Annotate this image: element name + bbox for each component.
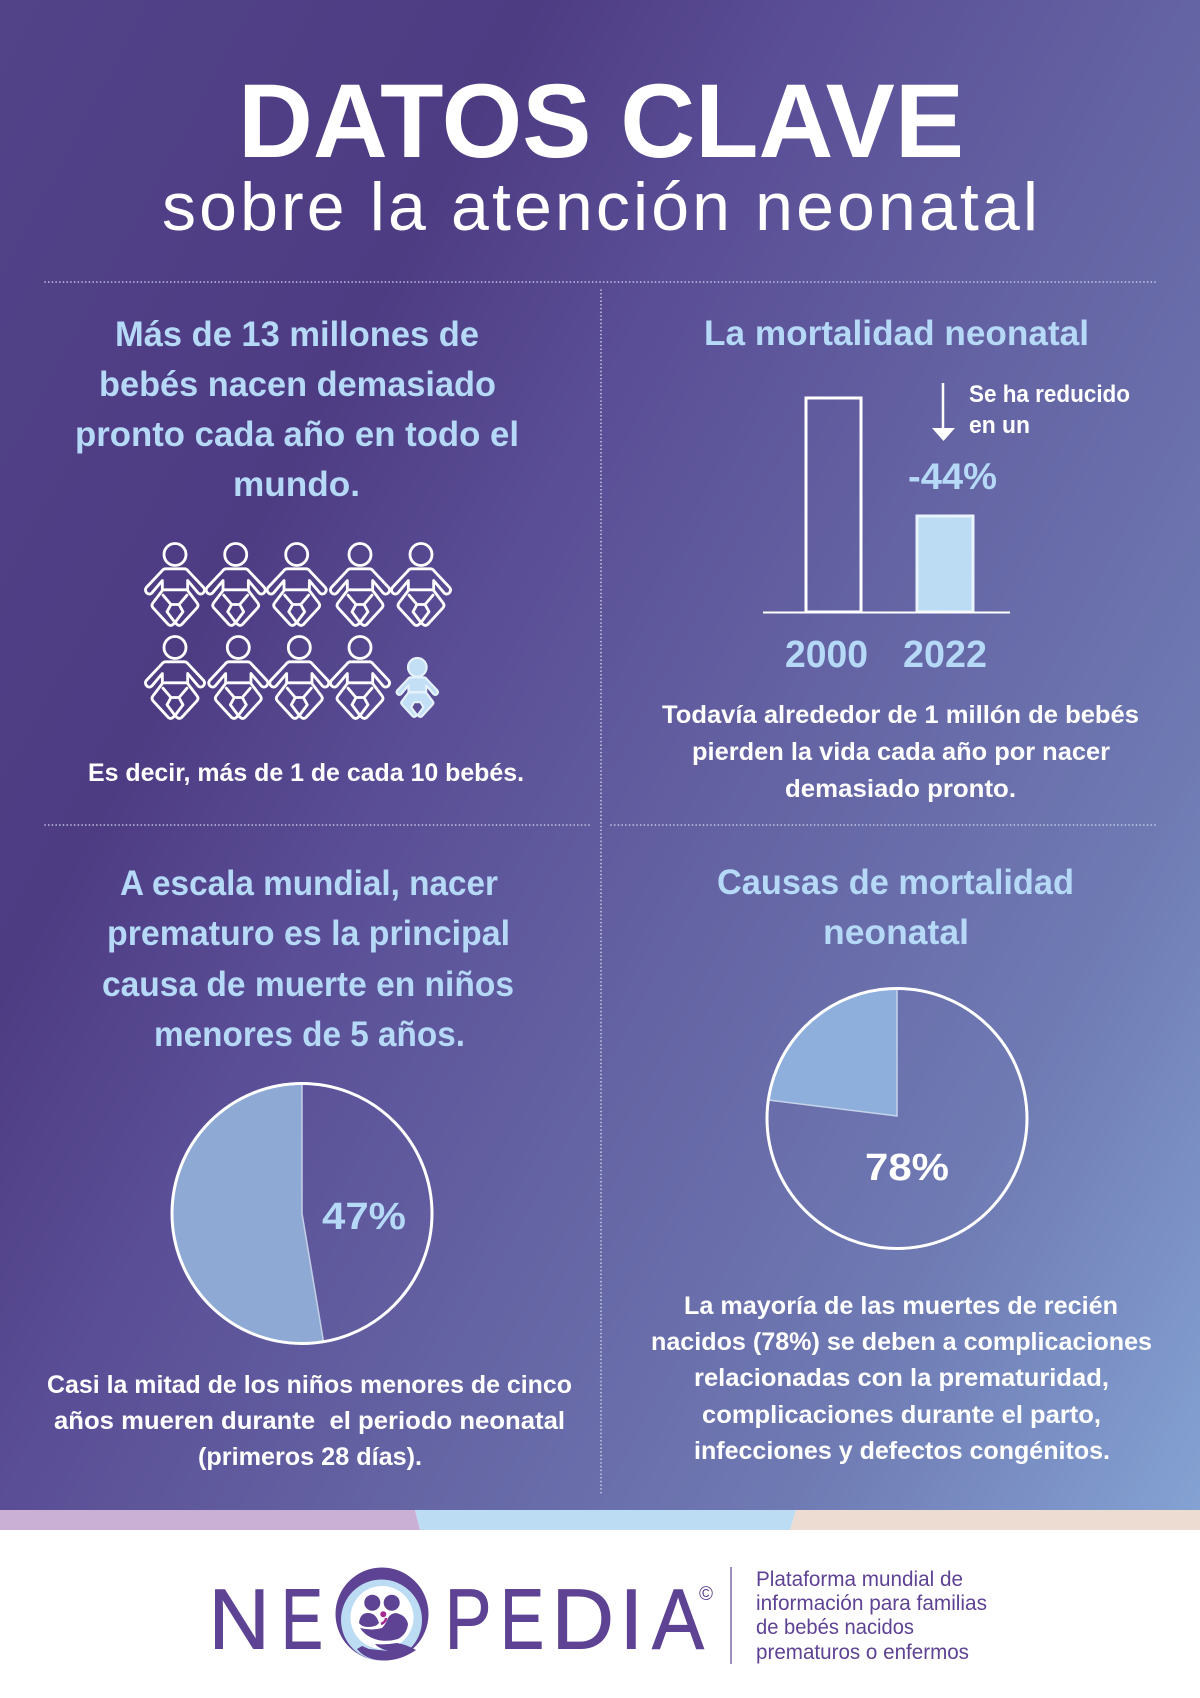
pie chart: 78%: 78% — [865, 1147, 949, 1189]
bar chart: 2000 vs 2022: 2000 — [785, 634, 868, 676]
arrow: down — [932, 383, 955, 441]
logo: Neopedia: D — [552, 1572, 614, 1668]
pie chart: 78% — [767, 988, 1027, 1248]
text: 1 millón: Todavía alrededor de 1 millón de bebés — [662, 701, 1139, 729]
bar chart: 2000 vs 2022 — [763, 398, 1010, 676]
logo: Neopedia: E — [500, 1572, 544, 1668]
bar chart: 2000 vs 2022: 2022 — [903, 634, 987, 676]
heading: principal causa: A escala mundial, nacer — [120, 864, 498, 903]
text: la mayoría — [651, 1292, 1152, 1465]
heading: principal causa — [102, 864, 514, 1054]
panel: neonatal mortality — [662, 314, 1139, 803]
heading: causas: neonatal — [823, 913, 969, 952]
text: casi la mitad: Casi la mitad de los niños menores de cinco — [47, 1371, 572, 1399]
heading: 13 millones — [75, 315, 519, 504]
panel: under five mortality — [47, 864, 572, 1471]
text: casi la mitad: años mueren durante el periodo neonatal — [54, 1407, 565, 1435]
heading: 13 millones: Más de 13 millones de — [115, 315, 479, 354]
heading: causas: Causas de mortalidad — [717, 863, 1074, 902]
text: tagline: prematuros o enfermos — [756, 1641, 969, 1664]
text: tagline: información para familias — [756, 1592, 987, 1615]
text: la mayoría: infecciones y defectos congénitos. — [694, 1437, 1110, 1465]
text: la mayoría: relacionadas con la prematuridad, — [694, 1364, 1109, 1392]
title: DATOS CLAVE — [238, 63, 964, 180]
panel: causes — [651, 863, 1152, 1465]
text: se ha reducido: en un — [969, 412, 1030, 439]
text: tagline — [756, 1568, 987, 1664]
icon: ten babies — [145, 544, 451, 718]
pie chart: 47%: 47% — [322, 1196, 406, 1238]
logo: Neopedia — [208, 1568, 713, 1668]
heading: 13 millones: bebés nacen demasiado — [99, 365, 496, 404]
logo: Neopedia: N — [208, 1572, 270, 1668]
text: la mayoría: nacidos (78%) se deben a complicaciones — [651, 1328, 1152, 1356]
title: sobre la atención neonatal — [162, 169, 1038, 245]
text: tagline: Plataforma mundial de — [756, 1568, 963, 1591]
copyright mark: © — [699, 1584, 713, 1605]
heading: 13 millones: pronto cada año en todo el — [75, 415, 519, 454]
logo: Neopedia: P — [445, 1572, 492, 1668]
text: casi la mitad: (primeros 28 días). — [198, 1443, 422, 1471]
heading: principal causa: causa de muerte en niños — [102, 965, 514, 1004]
logo: Neopedia: E — [281, 1572, 323, 1668]
stat: -44%: -44% — [908, 456, 997, 497]
text: se ha reducido: Se ha reducido — [969, 381, 1130, 408]
panel: preterm births — [75, 315, 524, 787]
heading: 13 millones: mundo. — [233, 465, 360, 504]
icon: family in circle — [336, 1568, 428, 1661]
logo: Neopedia: I — [620, 1572, 643, 1668]
colour band — [0, 1510, 1200, 1530]
text: 1 millón — [662, 701, 1139, 803]
text: 1 de cada 10: Es decir, más de 1 de cada 10 bebés. — [88, 759, 524, 787]
heading: principal causa: menores de 5 años. — [154, 1015, 465, 1054]
text: la mayoría: complicaciones durante el parto, — [702, 1401, 1101, 1429]
logo: Neopedia: A — [652, 1572, 704, 1668]
text: la mayoría: La mayoría de las muertes de recién — [684, 1292, 1118, 1320]
text: se ha reducido — [969, 381, 1130, 439]
text: 1 millón: demasiado pronto. — [785, 775, 1016, 803]
text: tagline: de bebés nacidos — [756, 1616, 914, 1639]
heading: mortalidad neonatal: La mortalidad neonatal — [704, 314, 1089, 353]
pie chart: 47% — [172, 1084, 432, 1344]
title — [162, 63, 1038, 245]
heading: causas — [717, 863, 1074, 952]
heading: principal causa: prematuro es la principal — [107, 914, 510, 953]
text: 1 millón: pierden la vida cada año por nacer — [692, 738, 1110, 766]
text: casi la mitad — [47, 1371, 572, 1471]
